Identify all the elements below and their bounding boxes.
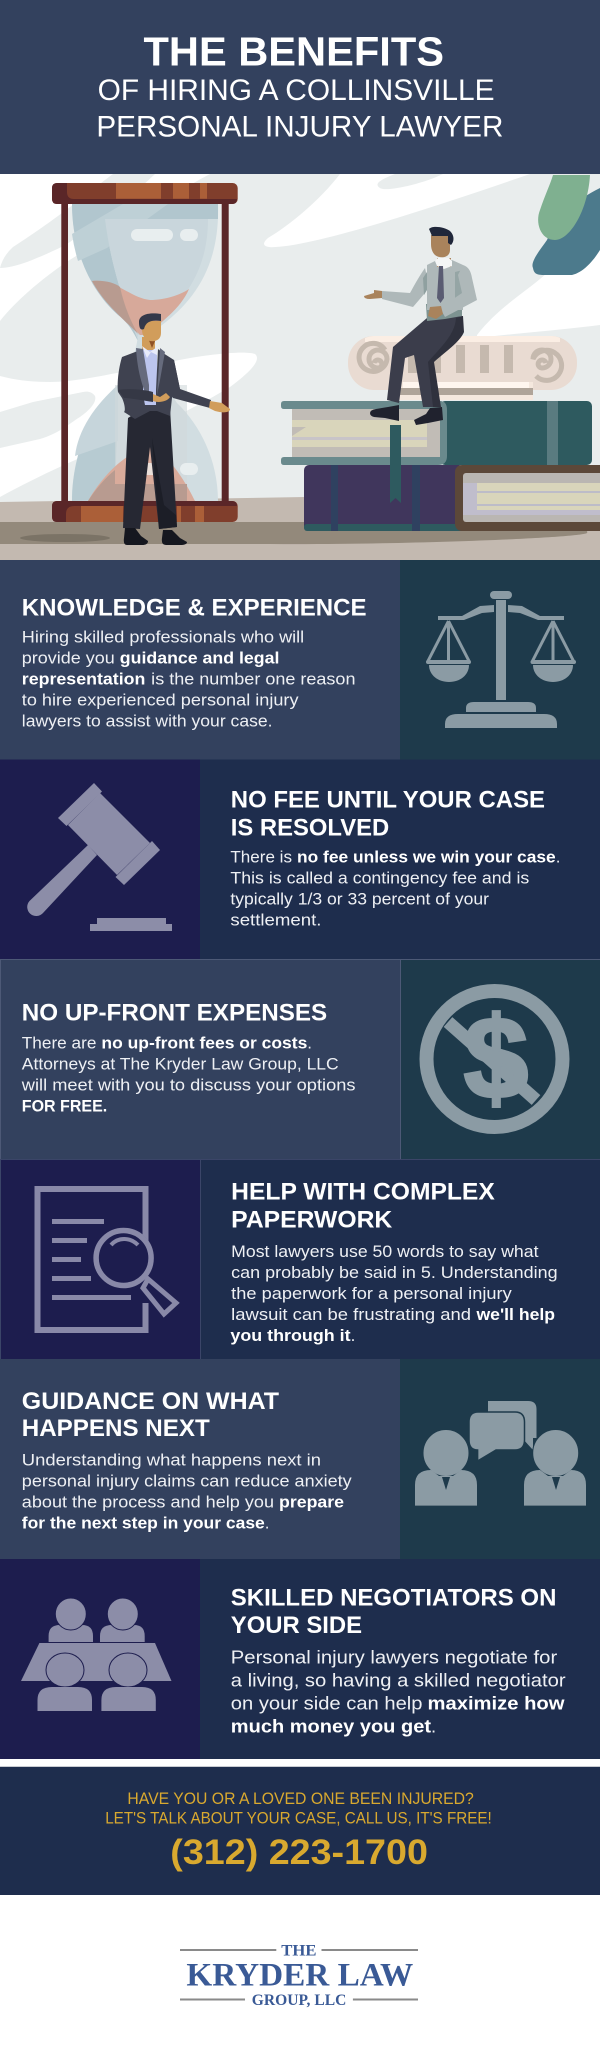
panel: guidance on what happens next xyxy=(0,1359,600,1559)
body text: Understanding what happens next in xyxy=(22,1450,321,1469)
heading: HELP WITH COMPLEX xyxy=(231,1179,495,1206)
body text: . xyxy=(351,1326,355,1345)
body text: is the number one reason xyxy=(151,669,356,688)
body text: Most lawyers use 50 words to say what xyxy=(231,1242,539,1261)
heading: SKILLED NEGOTIATORS ON xyxy=(231,1585,556,1612)
body text xyxy=(230,847,560,929)
man standing in suit xyxy=(118,313,230,545)
phone number: (312) 223-1700 xyxy=(170,1833,428,1872)
body text: for the next step in your case xyxy=(22,1513,265,1532)
column capital xyxy=(348,336,577,400)
call to action text xyxy=(105,1789,492,1827)
body text: There is xyxy=(230,847,292,866)
body text: guidance and legal xyxy=(120,648,279,667)
body text xyxy=(231,1647,566,1737)
illustration: lawyers with hourglass and books xyxy=(0,174,600,560)
panel: no fee until your case is resolved xyxy=(0,760,600,959)
body text: . xyxy=(431,1716,436,1737)
heading xyxy=(231,787,545,842)
logo: The Kryder Law Group, LLC: KRYDER LAW xyxy=(186,1958,413,1994)
body text: Hiring skilled professionals who will xyxy=(22,627,304,646)
call to action text: LET'S TALK ABOUT YOUR CASE, CALL US, IT'S FREE! xyxy=(105,1808,492,1827)
heading: NO UP-FRONT EXPENSES xyxy=(22,999,327,1026)
heading: HAPPENS NEXT xyxy=(22,1415,210,1442)
body text: . xyxy=(265,1513,270,1532)
icon: no dollar sign xyxy=(426,991,562,1127)
heading: YOUR SIDE xyxy=(231,1612,362,1639)
icon: no dollar sign: $ xyxy=(464,993,528,1123)
logo: The Kryder Law Group, LLC xyxy=(180,1943,418,2009)
title: THE BENEFITS xyxy=(144,28,444,74)
body text: There are xyxy=(22,1033,96,1052)
heading: IS RESOLVED xyxy=(231,815,389,842)
body text: much money you get xyxy=(231,1716,431,1737)
body text xyxy=(22,1450,352,1532)
body text: typically 1/3 or 33 percent of your xyxy=(230,889,489,908)
body text: provide you xyxy=(22,648,115,667)
heading: NO FEE UNTIL YOUR CASE xyxy=(231,787,545,814)
body text: maximize how xyxy=(428,1693,565,1714)
panel: help with complex paperwork xyxy=(0,1159,600,1359)
body text: can probably be said in 5. Understanding xyxy=(231,1263,558,1282)
man sitting on column xyxy=(364,227,477,425)
body text: FOR FREE. xyxy=(22,1096,107,1115)
heading: KNOWLEDGE & EXPERIENCE xyxy=(22,595,367,622)
heading: PAPERWORK xyxy=(231,1207,393,1234)
title: PERSONAL INJURY LAWYER xyxy=(96,110,503,143)
body text: personal injury claims can reduce anxiety xyxy=(22,1471,352,1490)
body text: about the process and help you xyxy=(22,1492,274,1511)
floor xyxy=(0,497,600,560)
call to action banner xyxy=(0,1766,600,1895)
body text: lawsuit can be frustrating and xyxy=(231,1305,471,1324)
body text: . xyxy=(307,1033,312,1052)
stack of books xyxy=(281,401,600,531)
icon: scales of justice xyxy=(426,591,576,728)
icon: gavel xyxy=(27,783,172,931)
icon: people negotiating at a table xyxy=(21,1598,172,1711)
heading: GUIDANCE ON WHAT xyxy=(22,1388,279,1415)
body text: we'll help xyxy=(475,1305,555,1324)
call to action text: HAVE YOU OR A LOVED ONE BEEN INJURED? xyxy=(127,1789,474,1808)
body text: will meet with you to discuss your options xyxy=(21,1075,356,1094)
icon: two people talking xyxy=(415,1401,586,1506)
logo: The Kryder Law Group, LLC: GROUP, LLC xyxy=(252,1992,346,2009)
icon: document with magnifying glass xyxy=(38,1189,176,1330)
body text: you through it xyxy=(230,1326,351,1345)
hourglass xyxy=(52,183,238,522)
body text: prepare xyxy=(279,1492,344,1511)
leaves xyxy=(532,175,600,275)
panel: no up-front expenses xyxy=(0,959,600,1159)
heading xyxy=(231,1585,556,1639)
body text: no fee unless we win your case xyxy=(297,847,556,866)
panel: knowledge and experience xyxy=(0,560,600,760)
title xyxy=(96,28,503,143)
body text: a living, so having a skilled negotiator xyxy=(231,1670,566,1691)
body text: to hire experienced personal injury xyxy=(22,690,299,709)
body text: on your side can help xyxy=(231,1693,422,1714)
body text: no up-front fees or costs xyxy=(101,1033,307,1052)
body text: This is called a contingency fee and is xyxy=(230,868,529,887)
heading xyxy=(231,1179,495,1234)
body text: settlement. xyxy=(230,910,322,929)
heading xyxy=(22,1388,279,1442)
body text: lawyers to assist with your case. xyxy=(22,711,272,730)
body text xyxy=(22,627,356,730)
body text: . xyxy=(556,847,560,866)
header banner xyxy=(0,0,600,174)
body text: representation xyxy=(22,669,145,688)
panel: skilled negotiators on your side xyxy=(0,1559,600,1759)
body text xyxy=(21,1033,356,1115)
logo: The Kryder Law Group, LLC: THE xyxy=(281,1943,316,1960)
title: OF HIRING A COLLINSVILLE xyxy=(98,74,495,107)
body text: Personal injury lawyers negotiate for xyxy=(231,1647,557,1668)
body text: the paperwork for a personal injury xyxy=(231,1284,512,1303)
body text: Attorneys at The Kryder Law Group, LLC xyxy=(22,1054,339,1073)
body text xyxy=(230,1242,558,1345)
